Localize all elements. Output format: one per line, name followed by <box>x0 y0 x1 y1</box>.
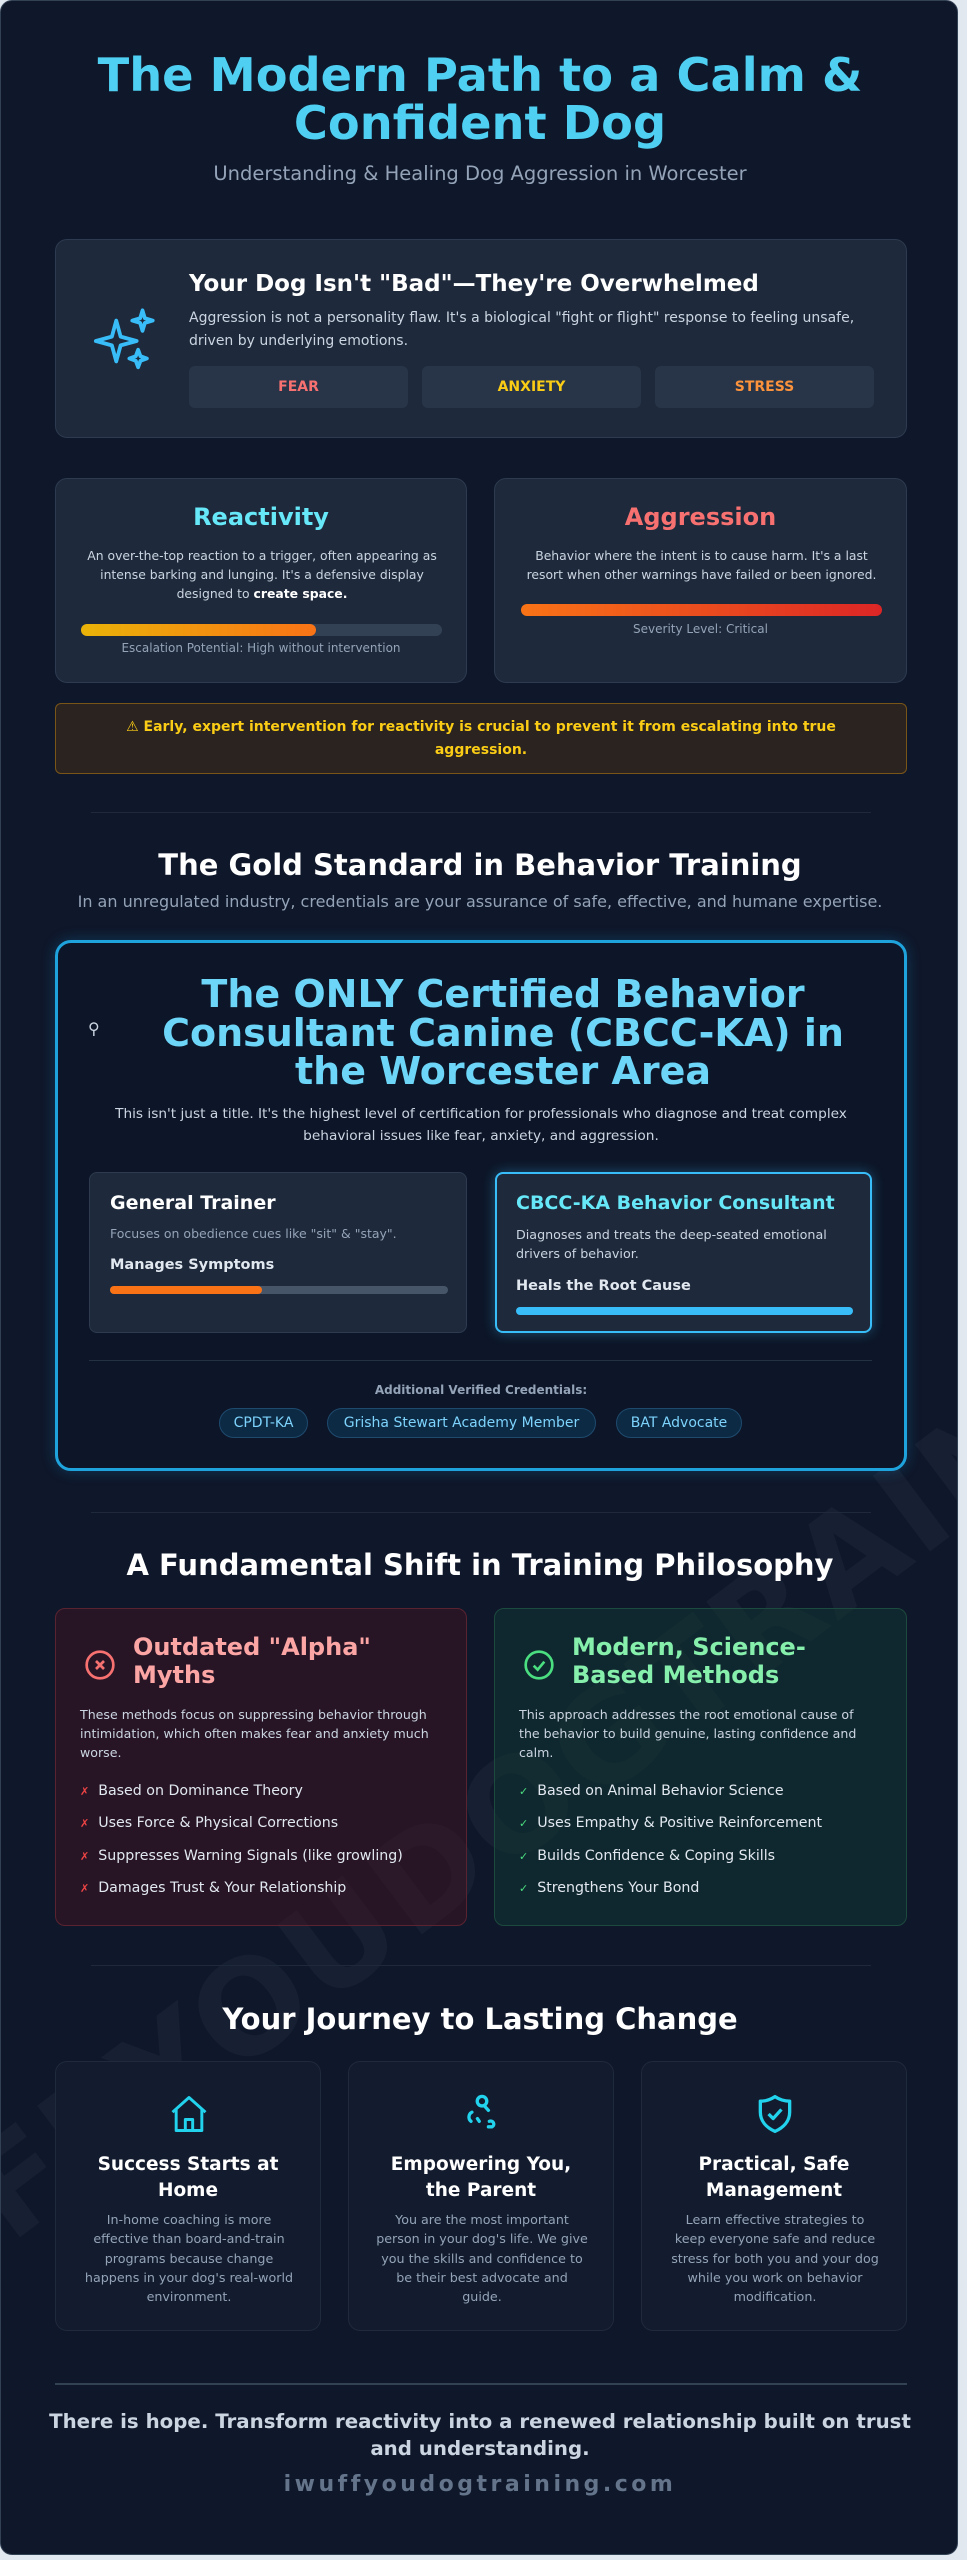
heading: Aggression <box>625 503 776 531</box>
url: iwuffyoudogtraining.com <box>284 2472 676 2497</box>
subcard: general trainer <box>89 1172 467 1333</box>
panel: CBCC: Grisha Stewart Academy Member <box>344 1415 579 1431</box>
card: management: while you work on behavior <box>688 2270 862 2285</box>
icon: shield <box>758 2094 792 2134</box>
list: ✓ Builds Confidence & Coping Skills <box>519 1848 775 1864</box>
pills <box>219 1408 742 1438</box>
icon: x circle <box>85 1650 115 1680</box>
card: parent: the Parent <box>426 2180 536 2201</box>
heading: Outdated "Alpha" <box>133 1633 371 1661</box>
panel: overwhelmed <box>55 239 907 438</box>
text: This approach addresses the root emotional cause of the behavior to build genuine, lasting confidence and calm. <box>519 1707 856 1760</box>
panel: modern <box>494 1608 907 1926</box>
subtitle: Understanding & Healing Dog Aggression in Worcester <box>213 162 747 185</box>
subcard: CBCC consultant: Heals the Root Cause <box>516 1278 691 1294</box>
list: ✓ Uses Empathy & Positive Reinforcement <box>519 1815 822 1831</box>
text: Behavior where the intent is to cause harm. It's a last resort when other warnings have failed or been ignored. <box>527 548 876 582</box>
card: management <box>641 2061 907 2331</box>
panel: CBCC: CPDT-KA <box>234 1415 293 1431</box>
panel: aggression <box>494 478 907 683</box>
bar: severity <box>521 604 882 616</box>
caption: Escalation Potential: High without intervention <box>121 641 401 655</box>
panel: CBCC <box>55 940 907 1471</box>
card: home: Home <box>158 2180 218 2201</box>
panel: reactivity <box>55 478 467 683</box>
tag: stress <box>655 366 874 408</box>
closing text: There is hope. Transform reactivity into a renewed relationship built on trust and understanding. <box>49 2410 911 2460</box>
heading: The ONLY Certified Behavior Consultant Canine (CBCC-KA) in the Worcester Area <box>162 972 844 1093</box>
card: home: Success Starts at <box>98 2154 278 2175</box>
text: These methods focus on suppressing behavior through intimidation, which often makes fear and anxiety much worse. <box>80 1707 429 1760</box>
heading: Myths <box>133 1661 215 1689</box>
card: home <box>55 2061 321 2331</box>
title: The Modern Path to a Calm & <box>98 48 862 102</box>
card: management: modification. <box>734 2289 816 2304</box>
icon: badge: ⚲ <box>88 1019 100 1038</box>
text: An over-the-top reaction to a trigger, often appearing as intense barking and lunging. It's a defensive display designed to create space. <box>87 548 437 601</box>
heading: philosophy: A Fundamental Shift in Training Philosophy <box>127 1548 833 1582</box>
heading: Based Methods <box>572 1661 779 1689</box>
tag: fear: FEAR <box>278 379 319 395</box>
list <box>80 1783 403 1896</box>
heading: Reactivity <box>193 503 329 531</box>
heading: journey: Your Journey to Lasting Change <box>222 2002 738 2036</box>
label: additional credentials: Additional Verified Credentials: <box>375 1383 587 1397</box>
card: management: keep everyone safe and reduce <box>675 2231 875 2246</box>
subcard: general trainer: Manages Symptoms <box>110 1257 274 1273</box>
card: management: Learn effective strategies to <box>686 2212 864 2227</box>
subcard: general trainer: Focuses on obedience cues like "sit" & "stay". <box>110 1226 397 1241</box>
icon: people <box>467 2094 496 2128</box>
list: ✗ Uses Force & Physical Corrections <box>80 1815 338 1831</box>
callout: warning: ⚠ Early, expert intervention for reactivity is crucial to prevent it from escalating into true aggression. <box>126 719 836 758</box>
icon: check circle <box>524 1650 554 1680</box>
card: management: Management <box>706 2180 842 2201</box>
bar: escalation <box>81 624 442 636</box>
subcard: general trainer: General Trainer <box>110 1192 276 1214</box>
panel: CBCC: BAT Advocate <box>631 1415 727 1431</box>
list: ✓ Based on Animal Behavior Science <box>519 1783 784 1799</box>
heading: gold standard: The Gold Standard in Behavior Training <box>158 848 802 882</box>
subcard: CBCC consultant <box>495 1172 872 1333</box>
list: ✗ Suppresses Warning Signals (like growling) <box>80 1848 403 1864</box>
subcard: CBCC consultant: CBCC-KA Behavior Consultant <box>516 1192 835 1214</box>
card: parent: Empowering You, <box>391 2154 571 2175</box>
list: ✓ Strengthens Your Bond <box>519 1880 699 1896</box>
heading: Modern, Science- <box>572 1633 806 1661</box>
tag: anxiety: ANXIETY <box>498 379 565 395</box>
caption: Severity Level: Critical <box>633 622 768 636</box>
list: ✗ Damages Trust & Your Relationship <box>80 1880 346 1896</box>
card: management: Practical, Safe <box>698 2154 849 2175</box>
card: management: stress for both you and your dog <box>671 2251 879 2266</box>
card: parent: You are the most important person in your dog's life. We give you the skills and confidence to be their best advocate and guide. <box>376 2212 588 2304</box>
title <box>98 48 862 150</box>
callout: warning <box>55 703 907 774</box>
text: This isn't just a title. It's the highest level of certification for professionals who diagnose and treat complex behavioral issues like fear, anxiety, and aggression. <box>115 1106 847 1144</box>
tag: fear <box>189 366 408 408</box>
heading <box>572 1633 806 1689</box>
title: Confident Dog <box>294 96 666 150</box>
icon: sparkles <box>94 308 155 370</box>
icon: house <box>172 2096 206 2132</box>
text: Aggression is not a personality flaw. It's a biological "fight or flight" response to feeling unsafe, driven by underlying emotions. <box>189 310 854 349</box>
tag: stress: STRESS <box>735 379 794 395</box>
subheading: In an unregulated industry, credentials are your assurance of safe, effective, and humane expertise. <box>78 892 882 911</box>
card: parent <box>348 2061 614 2331</box>
panel: outdated <box>55 1608 467 1926</box>
tag: anxiety <box>422 366 641 408</box>
list <box>519 1783 822 1896</box>
subcard: CBCC consultant: Diagnoses and treats the deep-seated emotional drivers of behavior. <box>516 1227 827 1261</box>
heading <box>133 1633 371 1689</box>
heading: Your Dog Isn't "Bad"—They're Overwhelmed <box>189 271 759 297</box>
card: home: In-home coaching is more effective than board-and-train programs because change happens in your dog's real-world environment. <box>85 2212 293 2304</box>
list: ✗ Based on Dominance Theory <box>80 1783 303 1799</box>
